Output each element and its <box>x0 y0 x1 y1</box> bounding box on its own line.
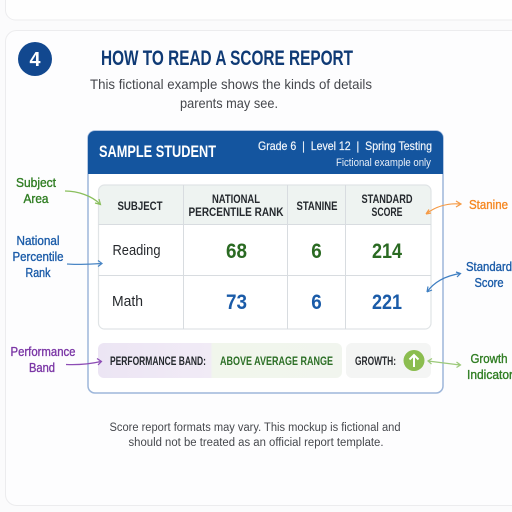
callout: standard score <box>427 259 512 292</box>
table column headers: NATIONAL <box>212 192 260 206</box>
callout: growth indicator: Growth <box>470 351 508 366</box>
reading row <box>112 240 402 263</box>
math row: 221 <box>372 291 402 314</box>
disclaimer text: should not be treated as an official report template. <box>128 437 384 449</box>
reading row: 214 <box>372 240 402 263</box>
table column headers: SCORE <box>372 205 402 219</box>
arrow: subject area <box>65 191 100 204</box>
callout: national percentile rank: National <box>16 233 60 248</box>
math row: 6 <box>311 291 322 314</box>
arrow: growth indicator <box>428 358 460 368</box>
callout: performance band: Band <box>29 360 55 375</box>
performance band bar <box>98 343 342 378</box>
callout: national percentile rank: Percentile <box>12 249 64 264</box>
report header bar: Grade 6 | Level 12 | Spring Testing <box>258 139 432 153</box>
score table <box>98 185 431 329</box>
sample score report <box>88 131 443 393</box>
reading row: 6 <box>311 240 322 263</box>
callout: stanine: Stanine <box>469 197 508 212</box>
intro text: This fictional example shows the kinds of details <box>90 76 372 92</box>
table column headers: STANINE <box>296 199 338 213</box>
previous panel edge <box>6 0 512 20</box>
table column headers <box>118 192 413 219</box>
icon: step number 4: 4 <box>30 49 41 71</box>
arrow: national percentile rank <box>67 260 102 266</box>
heading: HOW TO READ A SCORE REPORT <box>101 47 353 70</box>
growth indicator <box>346 343 431 378</box>
math row <box>112 291 402 314</box>
callout: national percentile rank <box>12 233 102 280</box>
math row: 73 <box>226 291 247 314</box>
table column headers: SUBJECT <box>118 199 163 213</box>
report header bar: Fictional example only <box>336 157 431 169</box>
callout: subject area: Area <box>24 191 49 206</box>
callout: standard score: Score <box>474 275 504 290</box>
callout: national percentile rank: Rank <box>26 265 51 280</box>
callout: performance band: Performance <box>10 344 76 359</box>
report header bar <box>88 131 443 174</box>
growth indicator: GROWTH: <box>355 356 396 368</box>
callout: performance band <box>10 344 102 375</box>
arrow: standard score <box>427 272 460 292</box>
arrow: performance band <box>66 358 102 365</box>
callout: stanine <box>426 197 508 214</box>
icon: up arrow <box>404 350 424 371</box>
math row: Math <box>112 293 143 310</box>
arrow: stanine <box>426 201 461 214</box>
disclaimer text: Score report formats may vary. This mockup is fictional and <box>110 422 400 434</box>
callout: growth indicator <box>428 351 512 382</box>
icon: step number 4 <box>18 42 52 76</box>
report header bar: SAMPLE STUDENT <box>99 143 216 161</box>
table column headers: STANDARD <box>362 192 413 206</box>
callout: subject area <box>16 175 100 206</box>
callout: subject area: Subject <box>16 175 56 190</box>
table column headers: PERCENTILE RANK <box>188 205 284 219</box>
reading row: 68 <box>226 240 247 263</box>
performance band bar: ABOVE AVERAGE RANGE <box>220 356 333 368</box>
performance band bar: PERFORMANCE BAND: <box>110 356 206 368</box>
intro text <box>90 76 372 111</box>
disclaimer text <box>110 422 400 449</box>
reading row: Reading <box>112 242 160 259</box>
intro text: parents may see. <box>180 95 278 111</box>
